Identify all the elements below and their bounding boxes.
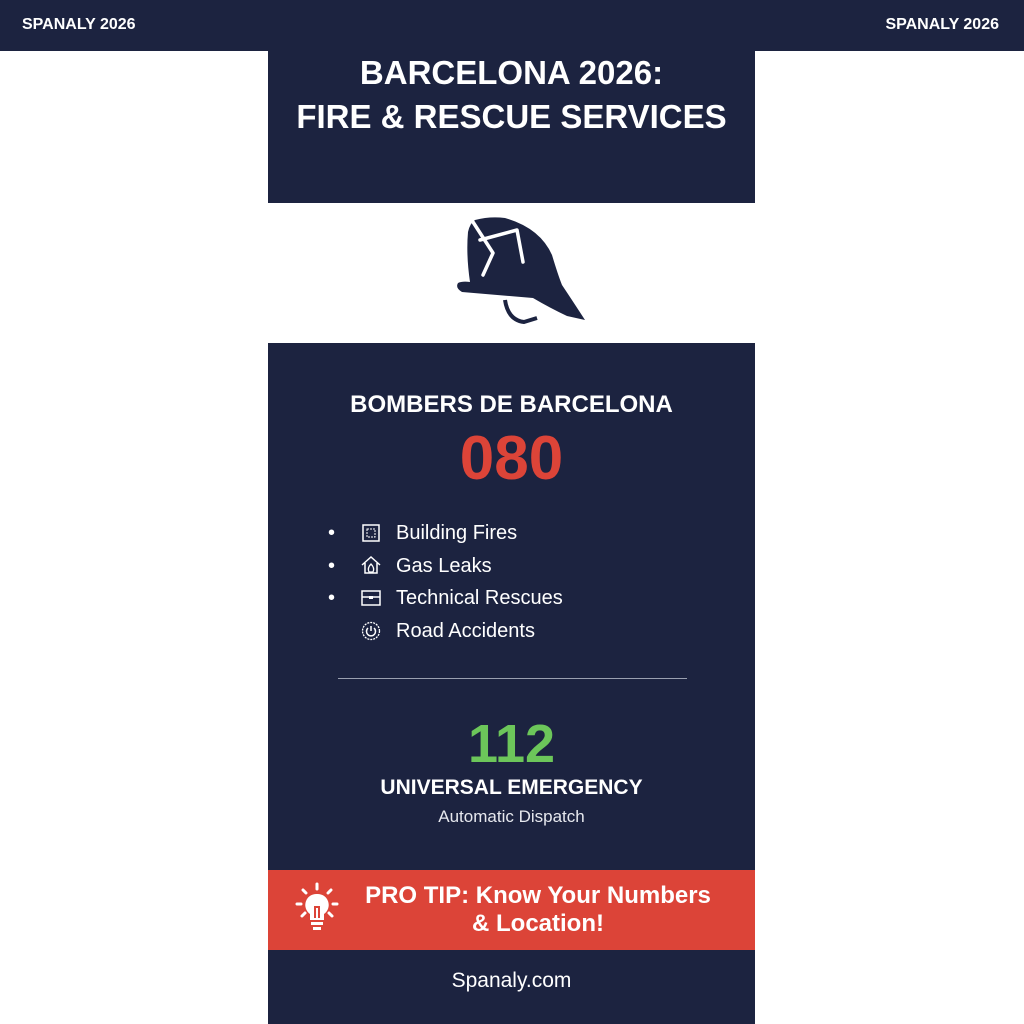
callout: pro tip: PRO TIP: Know Your Numbers [365, 882, 711, 909]
title panel: BARCELONA 2026: [360, 54, 663, 91]
list of services: Gas Leaks [396, 554, 492, 576]
number 080: 080 [460, 424, 563, 493]
icon: toolbox [361, 590, 381, 606]
heading: BOMBERS DE BARCELONA [350, 391, 673, 418]
title panel: FIRE & RESCUE SERVICES [296, 98, 727, 135]
footer: Spanaly.com [452, 969, 571, 992]
icon: fire helmet [457, 217, 585, 324]
list of services: Building Fires [396, 522, 517, 544]
list of services: Road Accidents [396, 620, 535, 642]
number 112: 112 [468, 714, 555, 774]
brand right: SPANALY 2026 [885, 16, 999, 33]
top bar [0, 0, 1024, 51]
title panel [268, 51, 755, 203]
footer [268, 950, 755, 1024]
universal emergency: UNIVERSAL EMERGENCY [380, 776, 643, 799]
list of services: Technical Rescues [396, 587, 563, 609]
icon: building [362, 524, 380, 542]
icon: gas house [362, 556, 380, 574]
list of services [328, 522, 563, 642]
brand left: SPANALY 2026 [22, 16, 136, 33]
list of services: • [328, 522, 335, 544]
callout: pro tip: & Location! [472, 910, 604, 937]
automatic dispatch: Automatic Dispatch [438, 807, 585, 826]
icon: power [362, 622, 380, 640]
list of services: • [328, 587, 335, 609]
callout: pro tip [268, 870, 755, 950]
list of services: • [328, 554, 335, 576]
panel: Bombers [268, 343, 755, 870]
icon: lightbulb [296, 882, 338, 930]
